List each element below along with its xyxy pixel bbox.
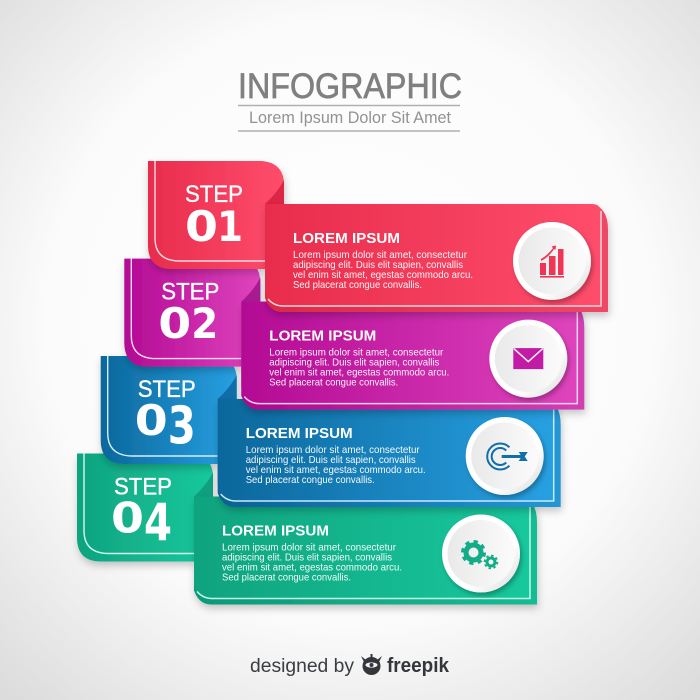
step 2 tab: [124, 259, 260, 367]
step 3 panel: [218, 399, 561, 507]
step 3 body text: Sed placerat congue convallis.: [246, 474, 375, 486]
step 1 tab: [148, 161, 284, 269]
step 2 body text: Sed placerat congue convallis.: [269, 377, 398, 389]
icon: freepik logo: [361, 654, 382, 675]
step 1 tab: 0: [185, 202, 218, 251]
step 2: [124, 259, 584, 410]
step 4 body text: Sed placerat congue convallis.: [222, 572, 351, 584]
icon: envelope: [513, 348, 543, 369]
step 1 body text: Sed placerat congue convallis.: [293, 279, 422, 291]
step 1 panel: [265, 204, 608, 312]
icon: gears: [462, 542, 497, 568]
step 4 icon disc: [442, 514, 520, 592]
step 4 tab: 4: [144, 494, 172, 554]
step 4 body text: Lorem ipsum dolor sit amet, consectetur: [222, 542, 396, 554]
step 4 panel: [194, 496, 537, 604]
step 3 tab: [101, 356, 237, 464]
step 3 tab: STEP: [138, 376, 196, 403]
step 1 heading: LOREM IPSUM: [293, 230, 400, 247]
icon: target: [487, 444, 528, 470]
step 3 tab: 0: [135, 396, 168, 445]
step 3 body text: vel enim sit amet, egestas commodo arcu.: [246, 464, 426, 476]
step 3: [101, 356, 561, 507]
step 3 body text: [246, 444, 426, 486]
step 2 body text: [269, 347, 449, 389]
step 2 tab: 2: [191, 299, 218, 348]
subtitle: Lorem Ipsum Dolor Sit Amet: [249, 108, 451, 127]
step 2 body text: Lorem ipsum dolor sit amet, consectetur: [269, 347, 444, 359]
footer credit: [250, 654, 450, 677]
step 4 heading: LOREM IPSUM: [222, 522, 329, 540]
step 1 body text: vel enim sit amet, egestas commodo arcu.: [293, 269, 473, 281]
step 2 icon disc: [489, 320, 567, 398]
step 2 heading: LOREM IPSUM: [269, 328, 376, 345]
icon: bar chart: [540, 246, 564, 278]
step 4 body text: [222, 542, 402, 584]
step 2 tab: STEP: [161, 279, 219, 306]
step 4 tab: 0: [111, 494, 144, 542]
step 1 tab: 1: [217, 202, 243, 251]
step 1 body text: Lorem ipsum dolor sit amet, consectetur: [293, 249, 467, 261]
title: INFOGRAPHIC: [238, 67, 462, 106]
step 2 panel: [241, 302, 584, 410]
step 1: [148, 161, 608, 312]
step 3 body text: Lorem ipsum dolor sit amet, consectetur: [246, 444, 420, 456]
footer credit: designed by: [250, 656, 355, 677]
step 4 body text: adipiscing elit. Duis elit sapien, convallis: [222, 552, 392, 564]
step 1 body text: [293, 249, 473, 291]
step 4 tab: STEP: [114, 474, 172, 500]
step 1 body text: adipiscing elit. Duis elit sapien, convallis: [293, 259, 463, 271]
step 3 icon disc: [466, 417, 544, 495]
title block: [238, 67, 462, 131]
step 3 tab: 3: [168, 396, 196, 456]
step 4 tab: [77, 454, 213, 562]
step 4 body text: vel enim sit amet, egestas commodo arcu.: [222, 562, 402, 574]
step 3 heading: LOREM IPSUM: [246, 425, 353, 442]
step 2 body text: adipiscing elit. Duis elit sapien, convallis: [269, 357, 439, 369]
footer credit: freepik: [387, 655, 450, 677]
step 1 tab: STEP: [185, 181, 243, 208]
step 2 tab: 0: [158, 299, 191, 348]
step 1 icon disc: [513, 222, 591, 300]
step 4: [77, 454, 537, 604]
step 3 body text: adipiscing elit. Duis elit sapien, convallis: [246, 454, 416, 466]
step 2 body text: vel enim sit amet, egestas commodo arcu.: [269, 367, 449, 379]
